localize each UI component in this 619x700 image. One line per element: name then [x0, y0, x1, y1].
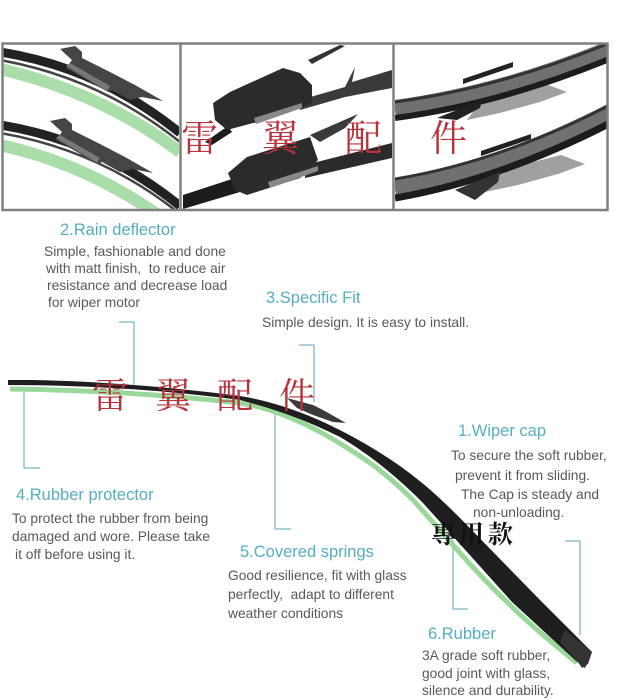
text: rubber protector: damaged and wore. Please take	[12, 529, 210, 544]
leader lines	[24, 322, 580, 635]
text: rain deflector: with matt finish, to reduce air	[46, 261, 225, 276]
text: specific fit: Simple design. It is easy to install.	[262, 315, 469, 330]
panel: photo of blade connector, top view	[0, 46, 180, 220]
text: rubber protector: it off before using it.	[15, 547, 135, 562]
upper blade	[0, 52, 180, 152]
text: covered springs: perfectly, adapt to different	[228, 587, 394, 602]
heading: rubber protector: 4.Rubber protector	[16, 486, 154, 504]
upper connector	[60, 46, 163, 101]
text: rubber: good joint with glass,	[422, 666, 550, 681]
text: wiper cap: prevent it from sliding.	[455, 468, 590, 482]
panel: photo of blade connector, underside view	[395, 42, 612, 200]
heading: rain deflector: 2.Rain deflector	[60, 221, 176, 239]
watermark on photos: 雷	[181, 118, 218, 159]
label: exclusive fit: 用	[459, 521, 484, 549]
wiper connector	[287, 398, 346, 423]
text: wiper cap: To secure the soft rubber,	[451, 448, 607, 463]
wiper end cap	[560, 630, 592, 668]
watermark on photos	[181, 118, 467, 159]
label: exclusive fit	[431, 521, 513, 549]
watermark on wiper	[92, 375, 315, 416]
text: rubber protector	[12, 511, 210, 562]
text: wiper cap	[451, 448, 607, 520]
photo strip frame	[2, 44, 608, 210]
text: covered springs: weather conditions	[228, 606, 343, 621]
watermark on wiper: 件	[279, 375, 315, 416]
text: covered springs	[228, 568, 407, 621]
text: rain deflector: Simple, fashionable and done	[44, 244, 226, 259]
text: rubber: silence and durability.	[422, 683, 554, 698]
text: rain deflector: for wiper motor	[48, 295, 140, 310]
watermark on wiper: 翼	[155, 375, 191, 416]
panel: photo of blade connector, front view	[183, 45, 392, 209]
watermark on photos: 件	[430, 118, 467, 159]
heading: covered springs: 5.Covered springs	[240, 543, 374, 561]
text: wiper cap: non-unloading.	[473, 504, 564, 520]
heading: specific fit: 3.Specific Fit	[266, 289, 360, 307]
text: rain deflector	[44, 244, 227, 310]
watermark on wiper: 配	[217, 375, 253, 416]
text: rubber	[422, 648, 554, 698]
text: covered springs: Good resilience, fit with glass	[228, 568, 407, 583]
main wiper blade	[8, 380, 592, 668]
heading: rubber: 6.Rubber	[428, 625, 496, 643]
text: rubber protector: To protect the rubber from being	[12, 511, 208, 526]
heading: wiper cap: 1.Wiper cap	[458, 422, 546, 440]
watermark on photos: 配	[345, 118, 382, 159]
label: exclusive fit: 款	[488, 521, 513, 549]
text: rain deflector: resistance and decrease load	[47, 278, 227, 293]
watermark on wiper: 雷	[92, 375, 128, 416]
text: wiper cap: The Cap is steady and	[461, 487, 599, 502]
watermark on photos: 翼	[262, 118, 299, 159]
label: exclusive fit: 專	[431, 521, 456, 549]
lower blade	[0, 125, 180, 220]
text: rubber: 3A grade soft rubber,	[422, 648, 550, 663]
lower connector	[50, 118, 153, 173]
